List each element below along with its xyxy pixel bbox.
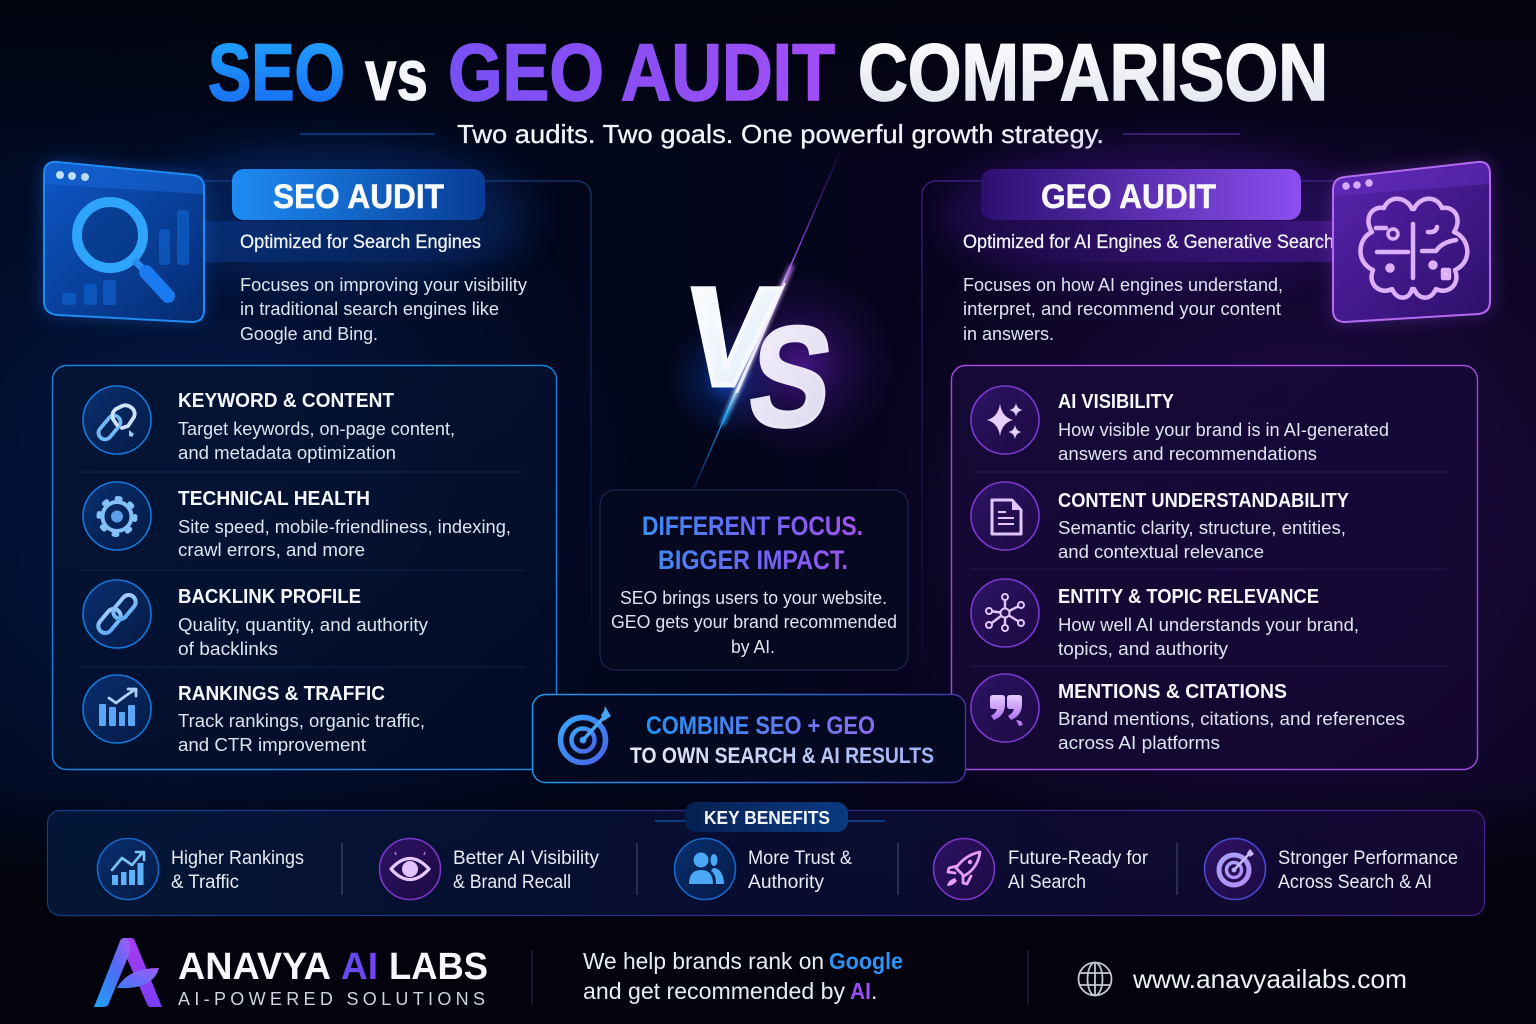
item: keyword and content bbox=[83, 386, 455, 463]
panel: key benefits bbox=[48, 802, 1484, 916]
item: rankings and traffic bbox=[83, 675, 425, 755]
logo: Anavya AI Labs: LABS bbox=[389, 946, 488, 988]
logo mark bbox=[94, 938, 162, 1007]
item: backlink profile: of backlinks bbox=[178, 638, 278, 659]
panel: SEO criteria list bbox=[52, 366, 556, 770]
item: rankings and traffic: RANKINGS & TRAFFIC bbox=[178, 682, 385, 705]
key benefits label: KEY BENEFITS bbox=[704, 807, 830, 828]
SEO tagline: Optimized for Search Engines bbox=[240, 232, 481, 253]
website footer: www.anavyaailabs.com bbox=[1132, 964, 1407, 994]
SEO description: Google and Bing. bbox=[240, 323, 378, 344]
panel: different focus callout bbox=[600, 490, 908, 670]
benefit: higher rankings: & Traffic bbox=[171, 872, 239, 893]
title bbox=[208, 28, 1328, 118]
icon: browser with magnifier bbox=[44, 162, 204, 322]
item: content understandability: CONTENT UNDERSTANDABILITY bbox=[1058, 489, 1349, 512]
SEO description: Focuses on improving your visibility bbox=[240, 274, 528, 295]
panel: different focus callout: GEO gets your brand recommended bbox=[611, 611, 897, 632]
VS emblem: S bbox=[741, 297, 841, 457]
title: vs bbox=[365, 36, 428, 116]
logo: Anavya AI Labs bbox=[94, 938, 488, 1009]
item: technical health: TECHNICAL HEALTH bbox=[178, 487, 370, 510]
item: entity and topic relevance: ENTITY & TOPIC RELEVANCE bbox=[1058, 585, 1319, 608]
benefit: more trust bbox=[674, 838, 852, 900]
item: technical health bbox=[83, 482, 511, 560]
title: GEO AUDIT bbox=[448, 28, 835, 118]
item: content understandability bbox=[971, 482, 1349, 562]
item: keyword and content: KEYWORD & CONTENT bbox=[178, 389, 394, 412]
benefit: future-ready: Future-Ready for bbox=[1008, 848, 1149, 869]
VS emblem: V bbox=[675, 259, 786, 415]
panel: different focus callout: DIFFERENT FOCUS. bbox=[642, 511, 863, 541]
item: keyword and content: and metadata optimization bbox=[178, 442, 396, 463]
benefit: better AI visibility: & Brand Recall bbox=[453, 872, 571, 893]
panel: GEO criteria list bbox=[952, 366, 1478, 770]
SEO description: in traditional search engines like bbox=[240, 298, 499, 319]
GEO heading pill: GEO AUDIT bbox=[1041, 178, 1216, 216]
panel: different focus callout: BIGGER IMPACT. bbox=[658, 545, 848, 575]
benefit: more trust: Authority bbox=[748, 872, 825, 893]
item: entity and topic relevance: How well AI understands your brand, bbox=[1058, 614, 1359, 635]
title: COMPARISON bbox=[858, 28, 1328, 118]
panel: combine callout: TO OWN SEARCH & AI RESULTS bbox=[630, 743, 934, 768]
item: technical health: crawl errors, and more bbox=[178, 539, 365, 560]
GEO description: in answers. bbox=[963, 323, 1054, 344]
tagline footer: Google bbox=[829, 948, 903, 974]
subtitle: Two audits. Two goals. One powerful growth strategy. bbox=[457, 119, 1104, 149]
panel: GEO audit bbox=[922, 145, 1360, 690]
panel: different focus callout: by AI. bbox=[731, 636, 775, 657]
item: content understandability: and contextual relevance bbox=[1058, 541, 1264, 562]
tagline footer: . bbox=[871, 978, 877, 1004]
item: AI visibility: How visible your brand is in AI-generated bbox=[1058, 419, 1389, 440]
item: AI visibility: answers and recommendations bbox=[1058, 443, 1317, 464]
tagline footer: and get recommended by bbox=[583, 978, 846, 1004]
icon: browser with brain bbox=[1333, 162, 1490, 322]
benefit: stronger performance: Stronger Performance bbox=[1278, 848, 1458, 869]
SEO heading pill: SEO AUDIT bbox=[273, 178, 444, 216]
item: entity and topic relevance: topics, and authority bbox=[1058, 638, 1229, 659]
benefit: higher rankings bbox=[98, 838, 304, 900]
benefit: higher rankings: Higher Rankings bbox=[171, 848, 304, 869]
title: SEO bbox=[208, 28, 345, 118]
key benefits label bbox=[655, 802, 885, 832]
icon: globe bbox=[1078, 962, 1112, 996]
item: mentions and citations: across AI platforms bbox=[1058, 732, 1220, 753]
GEO heading pill bbox=[981, 169, 1301, 220]
item: AI visibility: AI VISIBILITY bbox=[1058, 390, 1174, 413]
panel: combine callout bbox=[532, 694, 966, 782]
benefit: stronger performance: Across Search & AI bbox=[1278, 872, 1432, 893]
tagline footer: We help brands rank on bbox=[583, 948, 824, 974]
benefit: future-ready: AI Search bbox=[1008, 872, 1086, 893]
item: AI visibility bbox=[971, 386, 1389, 464]
item: mentions and citations: MENTIONS & CITATIONS bbox=[1058, 680, 1287, 703]
benefit: future-ready bbox=[934, 838, 1149, 900]
panel: combine callout: COMBINE SEO + GEO bbox=[646, 712, 875, 740]
panel: SEO audit bbox=[150, 145, 591, 690]
item: technical health: Site speed, mobile-friendliness, indexing, bbox=[178, 516, 511, 537]
item: backlink profile: Quality, quantity, and authority bbox=[178, 614, 429, 635]
GEO tagline: Optimized for AI Engines & Generative Search bbox=[963, 232, 1334, 253]
item: entity and topic relevance bbox=[971, 579, 1359, 659]
tagline footer bbox=[532, 948, 903, 1005]
GEO description: Focuses on how AI engines understand, bbox=[963, 274, 1283, 295]
item: keyword and content: Target keywords, on-page content, bbox=[178, 418, 455, 439]
panel: different focus callout: SEO brings users to your website. bbox=[620, 587, 887, 608]
VS emblem bbox=[666, 150, 895, 488]
item: backlink profile: BACKLINK PROFILE bbox=[178, 585, 361, 608]
item: content understandability: Semantic clarity, structure, entities, bbox=[1058, 517, 1346, 538]
logo: Anavya AI Labs: ANAVYA bbox=[178, 946, 331, 988]
item: mentions and citations bbox=[971, 674, 1405, 753]
GEO description bbox=[963, 274, 1283, 344]
item: rankings and traffic: and CTR improvement bbox=[178, 734, 366, 755]
logo: Anavya AI Labs: AI bbox=[341, 946, 378, 988]
website footer bbox=[1028, 950, 1407, 1005]
SEO description bbox=[240, 274, 528, 344]
benefit: better AI visibility bbox=[380, 838, 599, 900]
GEO description: interpret, and recommend your content bbox=[963, 298, 1281, 319]
item: mentions and citations: Brand mentions, citations, and references bbox=[1058, 708, 1405, 729]
tagline footer: AI bbox=[850, 978, 871, 1004]
benefit: more trust: More Trust & bbox=[748, 848, 852, 869]
SEO heading pill bbox=[232, 169, 485, 220]
icon: target bbox=[560, 706, 611, 762]
logo: Anavya AI Labs: AI-POWERED SOLUTIONS bbox=[178, 989, 485, 1009]
item: rankings and traffic: Track rankings, organic traffic, bbox=[178, 710, 425, 731]
item: backlink profile bbox=[83, 580, 429, 659]
benefit: better AI visibility: Better AI Visibility bbox=[453, 848, 599, 869]
benefit: stronger performance bbox=[1204, 838, 1458, 900]
